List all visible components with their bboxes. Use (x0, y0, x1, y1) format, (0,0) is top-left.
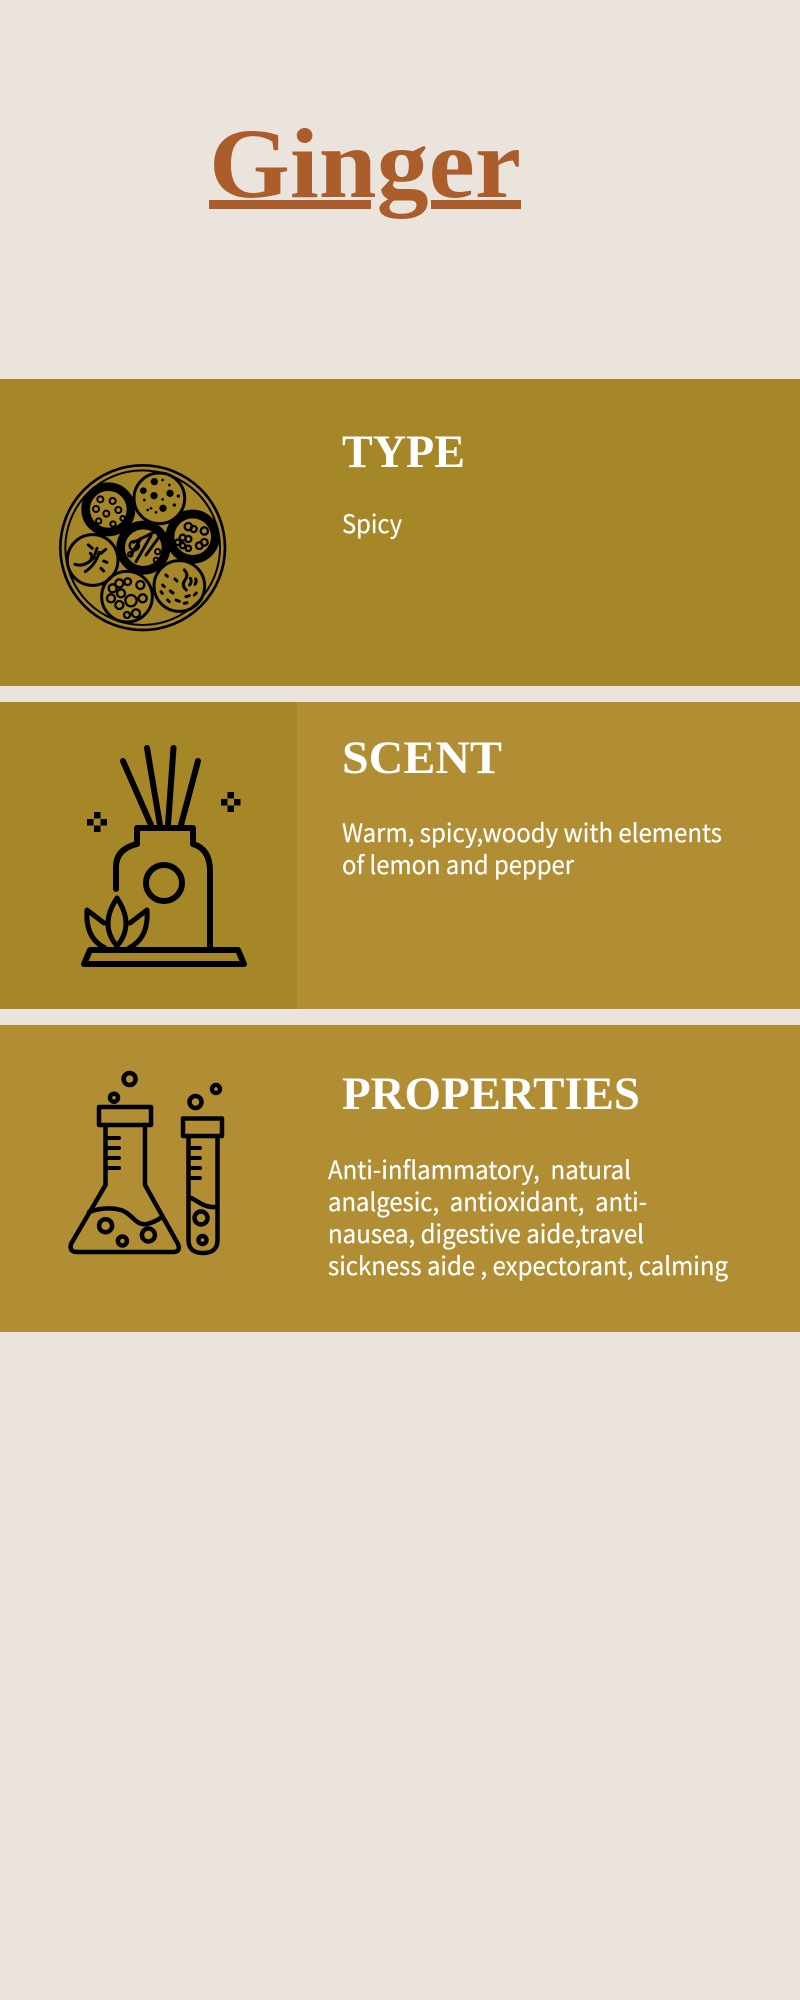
text: scent description: of lemon and pepper (342, 846, 574, 882)
title: Ginger (209, 108, 521, 219)
panel: properties (0, 1025, 800, 1332)
text: type value: Spicy (342, 505, 402, 541)
icon: flask and test tube (71, 1073, 222, 1253)
heading: type: TYPE (342, 426, 465, 478)
text: properties description: analgesic, antioxidant, anti- (328, 1183, 647, 1219)
text: scent description (342, 814, 722, 882)
heading: scent: SCENT (342, 732, 502, 784)
panel: type (0, 379, 800, 686)
heading: properties: PROPERTIES (342, 1068, 640, 1120)
text: properties description: nausea, digestive aide,travel (328, 1215, 644, 1251)
text: properties description: Anti-inflammatory, natural (328, 1151, 631, 1187)
icon: reed diffuser (84, 748, 244, 964)
text: properties description (328, 1151, 728, 1283)
text: properties description: sickness aide , expectorant, calming (328, 1247, 728, 1283)
icon: spice plate (60, 465, 225, 630)
text: scent description: Warm, spicy,woody with elements (342, 814, 722, 850)
panel: scent (0, 702, 800, 1009)
